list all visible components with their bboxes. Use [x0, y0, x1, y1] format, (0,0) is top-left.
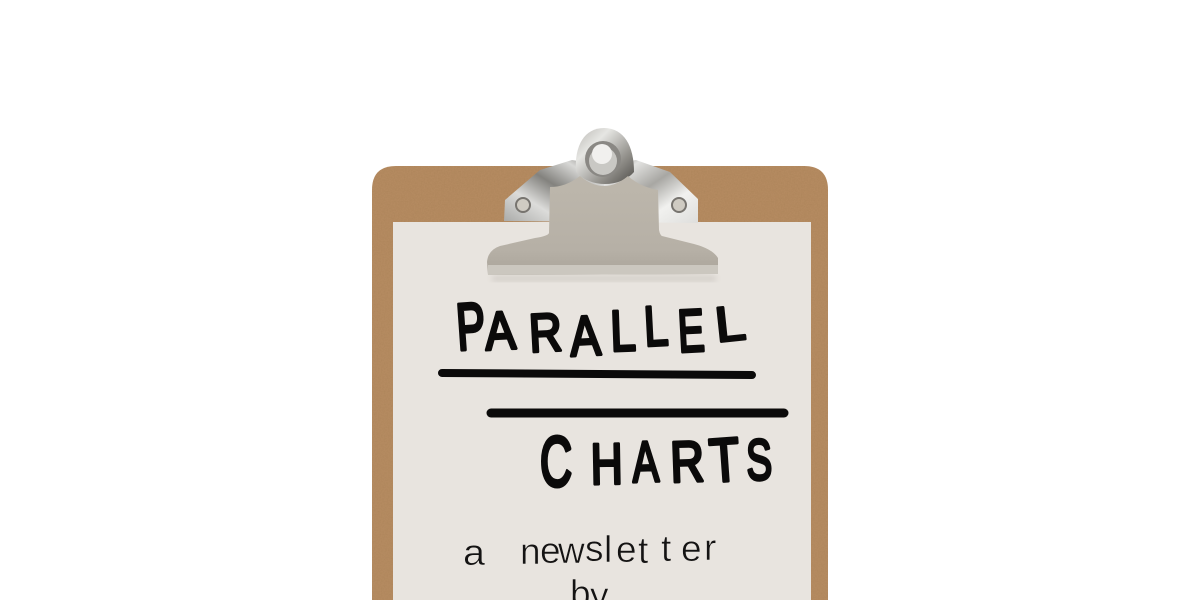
clip plate [487, 176, 718, 275]
title word: Charts: A [631, 430, 660, 495]
title word: Parallel: L [642, 294, 670, 358]
subtitle: a newsletter: a [463, 532, 485, 573]
right rivet [672, 198, 686, 212]
title word: Parallel: A [568, 304, 603, 368]
title word: Parallel: R [527, 302, 564, 364]
title word: Parallel: P [454, 289, 488, 364]
title word: Charts: T [707, 425, 742, 495]
left rivet [516, 198, 530, 212]
title word: Parallel: L [712, 294, 748, 352]
paper sheet [393, 222, 811, 600]
clip ring [576, 128, 634, 184]
rule above Charts [491, 408, 784, 418]
left wing [504, 160, 604, 222]
title word: Parallel: L [609, 299, 637, 364]
ring inner seat [585, 141, 621, 177]
clip shadow [492, 276, 716, 281]
title word: Charts [540, 423, 773, 502]
title word: Parallel: E [676, 296, 706, 365]
clip hole [592, 144, 612, 164]
title word: Parallel [454, 289, 748, 368]
clip plate edge [488, 265, 718, 275]
title word: Charts: R [669, 430, 705, 495]
title word: Charts: C [540, 423, 572, 502]
clipboard backing board [372, 166, 828, 600]
metal clip [487, 128, 718, 281]
right wing [604, 160, 698, 223]
title word: Charts: S [745, 429, 773, 493]
title word: Charts: H [590, 431, 623, 496]
rule under Parallel [442, 373, 752, 375]
title word: Parallel: A [483, 300, 518, 362]
subtitle: a newsletter: newsletter [520, 527, 716, 572]
